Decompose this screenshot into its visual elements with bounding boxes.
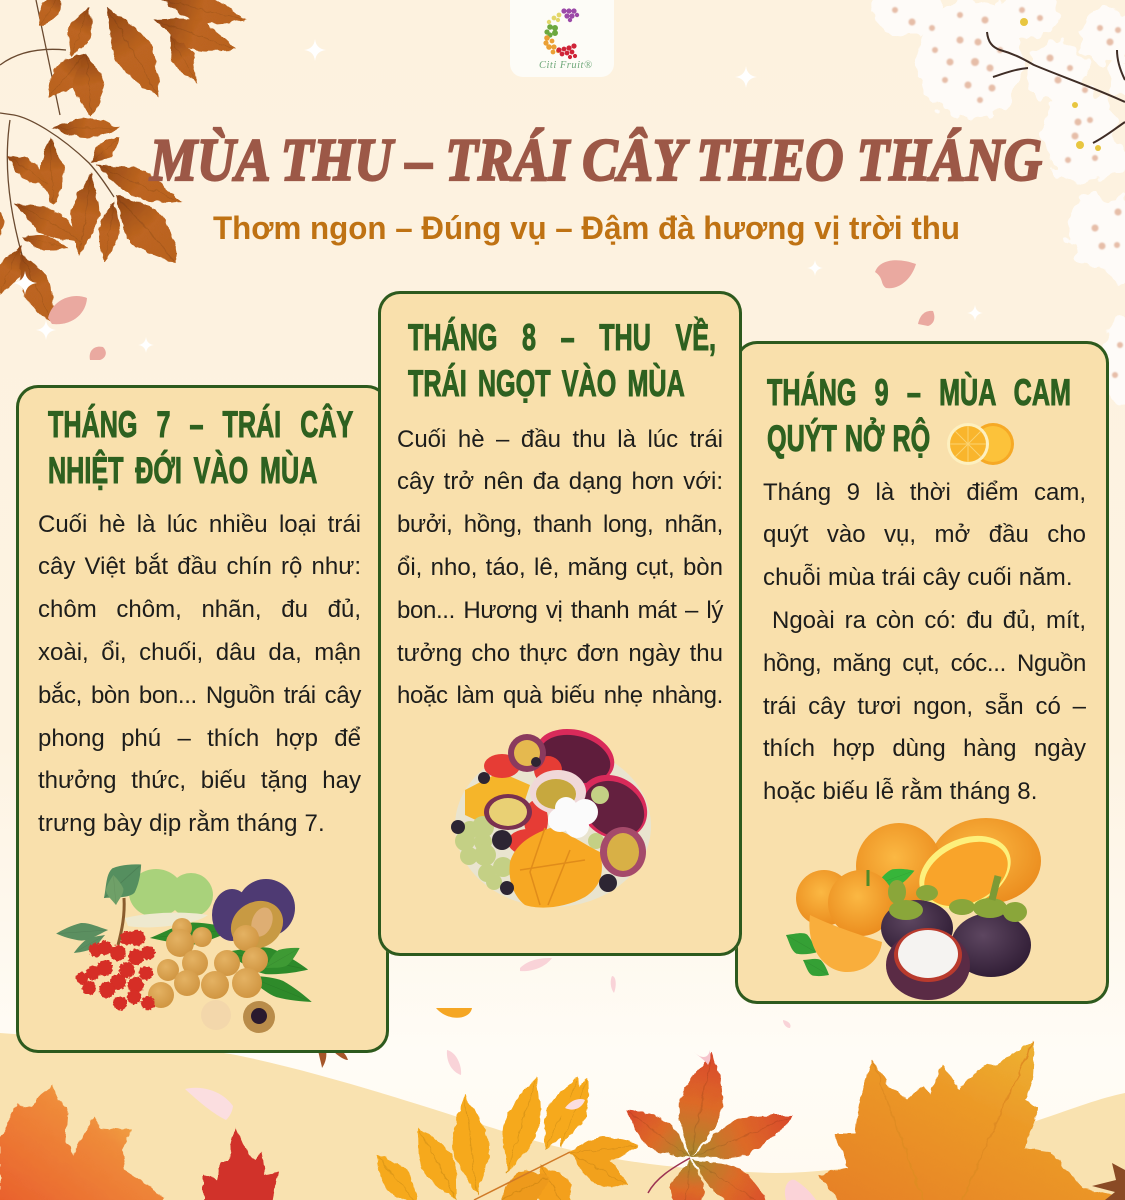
text block: August description: bon... Hương vị thanh mát – lý bbox=[397, 597, 723, 624]
leaf: red maple bbox=[203, 1127, 278, 1200]
text block: August description: Cuối hè – đầu thu là lúc trái bbox=[397, 426, 723, 453]
decoration: autumn branch top left bbox=[0, 0, 249, 329]
text block: July description: xoài, ổi, chuối, dâu da, mận bbox=[38, 639, 361, 666]
text block: September description: Ngoài ra còn có: đu đủ, mít, bbox=[772, 607, 1086, 634]
text block: August description: cây trở nên đa dạng hơn với: bbox=[397, 468, 723, 495]
logo: Citi Fruit bbox=[510, 0, 614, 77]
text block: July description: Cuối hè là lúc nhiều loại trái bbox=[38, 511, 361, 538]
text block: August description: ổi, nho, táo, lê, măng cụt, bòn bbox=[397, 554, 723, 581]
icon: lemon slices bbox=[947, 423, 1014, 465]
leaf: five finger red leaf bbox=[617, 1048, 801, 1200]
heading: August line 2: TRÁI NGỌT VÀO MÙA bbox=[408, 363, 685, 404]
heading: July line 2: NHIỆT ĐỚI VÀO MÙA bbox=[48, 450, 317, 491]
text block: September description: hoặc biếu lễ rằm tháng 8. bbox=[763, 778, 1038, 805]
text block: July description: trưng bày dịp rằm tháng 7. bbox=[38, 810, 325, 837]
text block: September description: Tháng 9 là thời điểm cam, bbox=[763, 479, 1086, 506]
leaf: large golden maple bottom right bbox=[819, 1040, 1125, 1200]
text block: September description: hồng, măng cụt, cóc... Nguồn bbox=[763, 650, 1086, 677]
panel: September card bbox=[735, 341, 1109, 1004]
peach wave bbox=[0, 1033, 1125, 1200]
decoration: orange slice and star anise behind the cards bbox=[318, 1008, 472, 1068]
text block: July description: phong phú – thích hợp để bbox=[38, 725, 361, 752]
illustration: July fruit bundle bbox=[56, 864, 312, 1033]
text block: July description bbox=[38, 511, 362, 837]
text block: August description bbox=[397, 426, 724, 709]
decoration: bottom petal bbox=[785, 1180, 816, 1200]
text block: August description: bưởi, hồng, thanh long, nhãn, bbox=[397, 511, 723, 538]
text block: September description: chuỗi mùa trái cây cuối năm. bbox=[763, 564, 1073, 591]
panel: July card bbox=[16, 385, 389, 1053]
heading: July line 1: THÁNG 7 – TRÁI CÂY bbox=[48, 404, 353, 445]
leaf: yellow rowan branch bbox=[365, 1071, 640, 1200]
panel: August card bbox=[378, 291, 742, 956]
decoration: cherry blossom branches top right bbox=[872, 0, 1125, 405]
subtitle: Thơm ngon – Đúng vụ – Đậm đà hương vị trời thu bbox=[213, 210, 960, 246]
heading: September line 2: QUÝT NỞ RỘ bbox=[767, 418, 930, 459]
heading: August line 1: THÁNG 8 – THU VỀ, bbox=[408, 317, 716, 358]
text block: August description: hoặc làm quà biếu nhẹ nhàng. bbox=[397, 682, 723, 709]
text block: July description: cây Việt bắt đầu chín rộ như: bbox=[38, 553, 361, 580]
illustration: oranges and mangosteens bbox=[786, 818, 1041, 1000]
text block: September description: quýt vào vụ, mở đầu cho bbox=[763, 521, 1086, 548]
heading: September line 1: THÁNG 9 – MÙA CAM bbox=[767, 372, 1071, 413]
text block: July description: chôm chôm, nhãn, đu đủ, bbox=[38, 596, 361, 623]
text block: September description: trái cây tươi ngon, sẵn có – bbox=[763, 693, 1086, 720]
text block: September description: thích hợp dùng hàng ngày bbox=[763, 735, 1086, 762]
decoration: star anise bottom right bbox=[1092, 1163, 1125, 1200]
text block: July description: thưởng thức, biếu tặng hay bbox=[38, 767, 361, 794]
decoration: sparkles bbox=[13, 39, 983, 353]
logo: Citi Fruit: Citi Fruit® bbox=[539, 60, 592, 71]
text block: July description: bắc, bòn bon... Nguồn trái cây bbox=[38, 682, 361, 709]
text block: September description bbox=[763, 479, 1086, 805]
illustration: fruit platter bbox=[451, 729, 651, 908]
leaf: orange maple bottom left bbox=[0, 1085, 164, 1200]
text block: August description: tưởng cho thực đơn ngày thu bbox=[397, 640, 723, 667]
decoration: petals bbox=[48, 260, 934, 1120]
